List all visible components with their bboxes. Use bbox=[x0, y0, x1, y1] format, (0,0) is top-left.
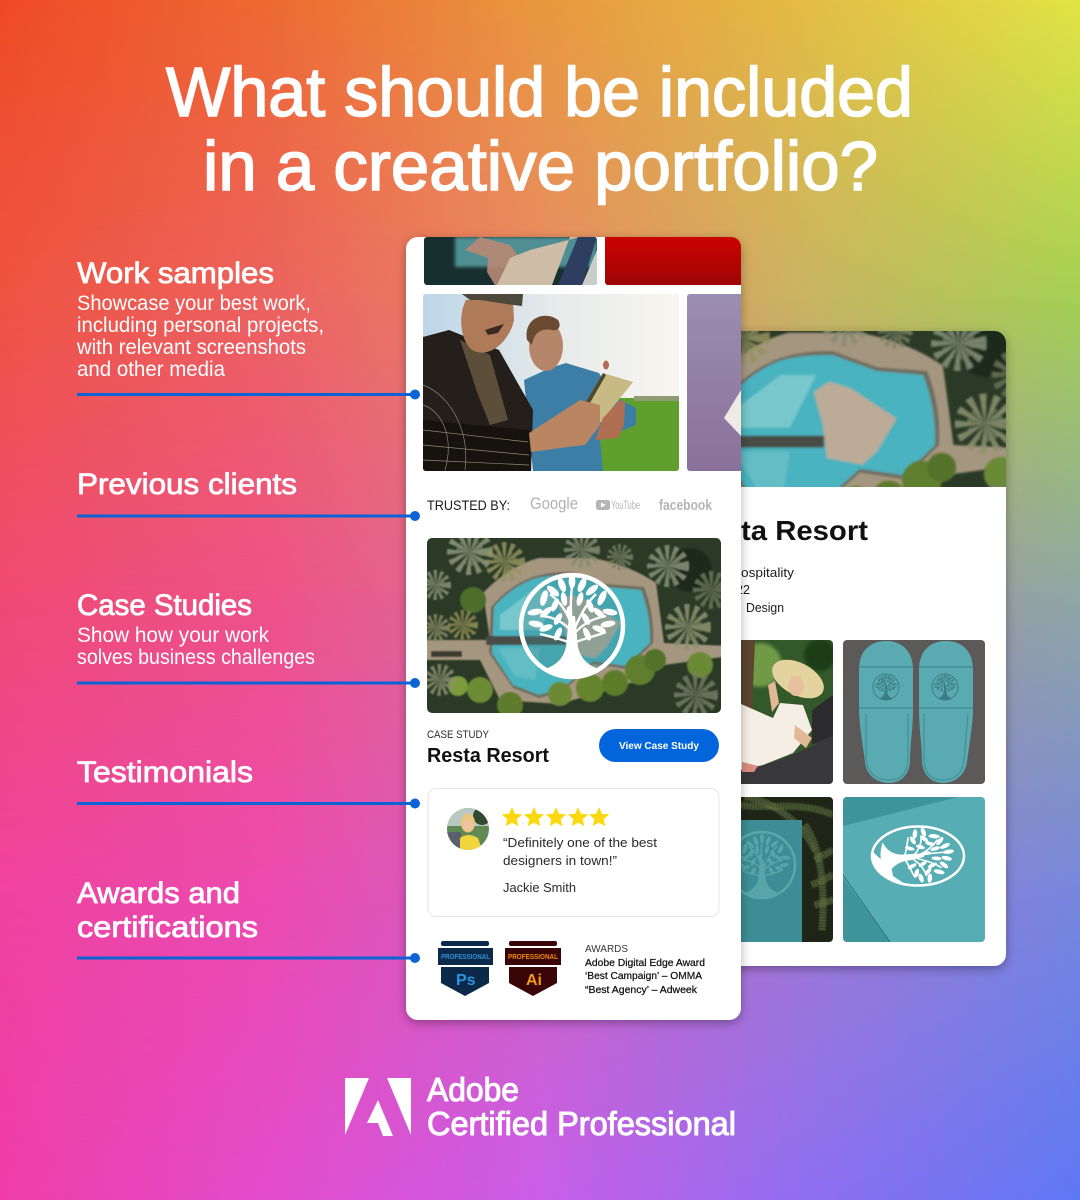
badge: Photoshop professional: PROFESSIONAL bbox=[441, 954, 491, 961]
callout: work samples: Work samples bbox=[77, 257, 274, 290]
photo: shoe detail bbox=[424, 237, 597, 285]
Adobe Certified Professional logo: Certified Professional bbox=[427, 1105, 736, 1142]
callout: work samples bbox=[76, 257, 420, 400]
callout: awards and certifications: Awards and bbox=[77, 877, 240, 910]
project details: ospitality bbox=[741, 566, 795, 580]
testimonial card bbox=[428, 788, 719, 916]
awards list: “Best Agency’ – Adweek bbox=[585, 984, 698, 996]
avatar bbox=[447, 807, 491, 850]
project details bbox=[736, 566, 795, 615]
five star rating bbox=[502, 807, 609, 826]
panel: portfolio page bbox=[406, 237, 741, 1020]
photo: teal slippers bbox=[843, 640, 985, 784]
trusted by logos bbox=[427, 494, 713, 514]
trusted by logos: TRUSTED BY: bbox=[427, 497, 510, 513]
badge: Illustrator professional bbox=[505, 941, 561, 996]
photo: purple panel bbox=[687, 294, 741, 471]
callout: case studies: Show how your work bbox=[77, 624, 269, 647]
photo: case study image with tree logo bbox=[427, 538, 721, 713]
callout: work samples: Showcase your best work, bbox=[77, 292, 311, 315]
quote text: designers in town!” bbox=[503, 853, 617, 868]
callout: case studies bbox=[77, 589, 420, 688]
title: What should be included bbox=[166, 53, 913, 131]
trusted by logos: YouTube bbox=[611, 498, 640, 512]
project details: Design bbox=[746, 601, 784, 615]
callout: work samples: and other media bbox=[77, 358, 225, 381]
badge: Illustrator professional: PROFESSIONAL bbox=[508, 954, 559, 961]
callout: case studies: solves business challenges bbox=[77, 646, 315, 669]
callout: previous clients bbox=[77, 468, 420, 521]
badge: Photoshop professional: Ps bbox=[456, 972, 476, 989]
quote text bbox=[503, 835, 657, 895]
button: View Case Study bbox=[599, 729, 719, 762]
awards list: AWARDS bbox=[585, 943, 628, 955]
quote text: “Definitely one of the best bbox=[503, 835, 657, 850]
photo: teal stationery with logo bbox=[843, 797, 985, 942]
Adobe Certified Professional logo bbox=[345, 1071, 736, 1142]
callout: testimonials bbox=[77, 756, 420, 808]
quote text: Jackie Smith bbox=[503, 880, 576, 895]
button: View Case Study: View Case Study bbox=[619, 740, 699, 752]
Adobe Certified Professional logo: Adobe bbox=[427, 1071, 519, 1108]
awards list bbox=[585, 943, 705, 996]
callout: testimonials: Testimonials bbox=[77, 756, 253, 789]
callout: work samples: with relevant screenshots bbox=[76, 336, 306, 359]
photo: farmers with tablet bbox=[423, 294, 679, 471]
trusted by logos: Google bbox=[530, 494, 578, 513]
photo: resort pool aerial bbox=[741, 331, 1006, 487]
panel: back case study page bbox=[741, 328, 1012, 975]
case study caption bbox=[427, 729, 549, 767]
badge: Photoshop professional bbox=[438, 941, 493, 996]
title bbox=[166, 53, 913, 205]
awards list: Adobe Digital Edge Award bbox=[585, 957, 705, 969]
callout: case studies: Case Studies bbox=[77, 589, 252, 622]
awards list: ‘Best Campaign’ – OMMA bbox=[585, 970, 702, 982]
icon: Adobe mark bbox=[345, 1078, 411, 1136]
project details: 22 bbox=[736, 583, 750, 597]
icon: YouTube play bbox=[596, 500, 610, 510]
heading: Resta Resort: ta Resort bbox=[741, 515, 868, 546]
case study caption: CASE STUDY bbox=[427, 729, 490, 741]
callout: awards and certifications bbox=[77, 877, 420, 963]
photo: woman in sun hat bbox=[741, 640, 833, 784]
photo: red panel bbox=[605, 237, 741, 285]
badge: Illustrator professional: Ai bbox=[526, 972, 542, 989]
callout: work samples: including personal projects, bbox=[77, 314, 324, 337]
case study caption: Resta Resort bbox=[427, 744, 549, 767]
photo: fern and teal card bbox=[741, 797, 833, 942]
callout: awards and certifications: certifications bbox=[77, 911, 258, 944]
trusted by logos: facebook bbox=[659, 497, 713, 514]
title: in a creative portfolio? bbox=[203, 127, 878, 205]
callout: previous clients: Previous clients bbox=[77, 468, 297, 501]
